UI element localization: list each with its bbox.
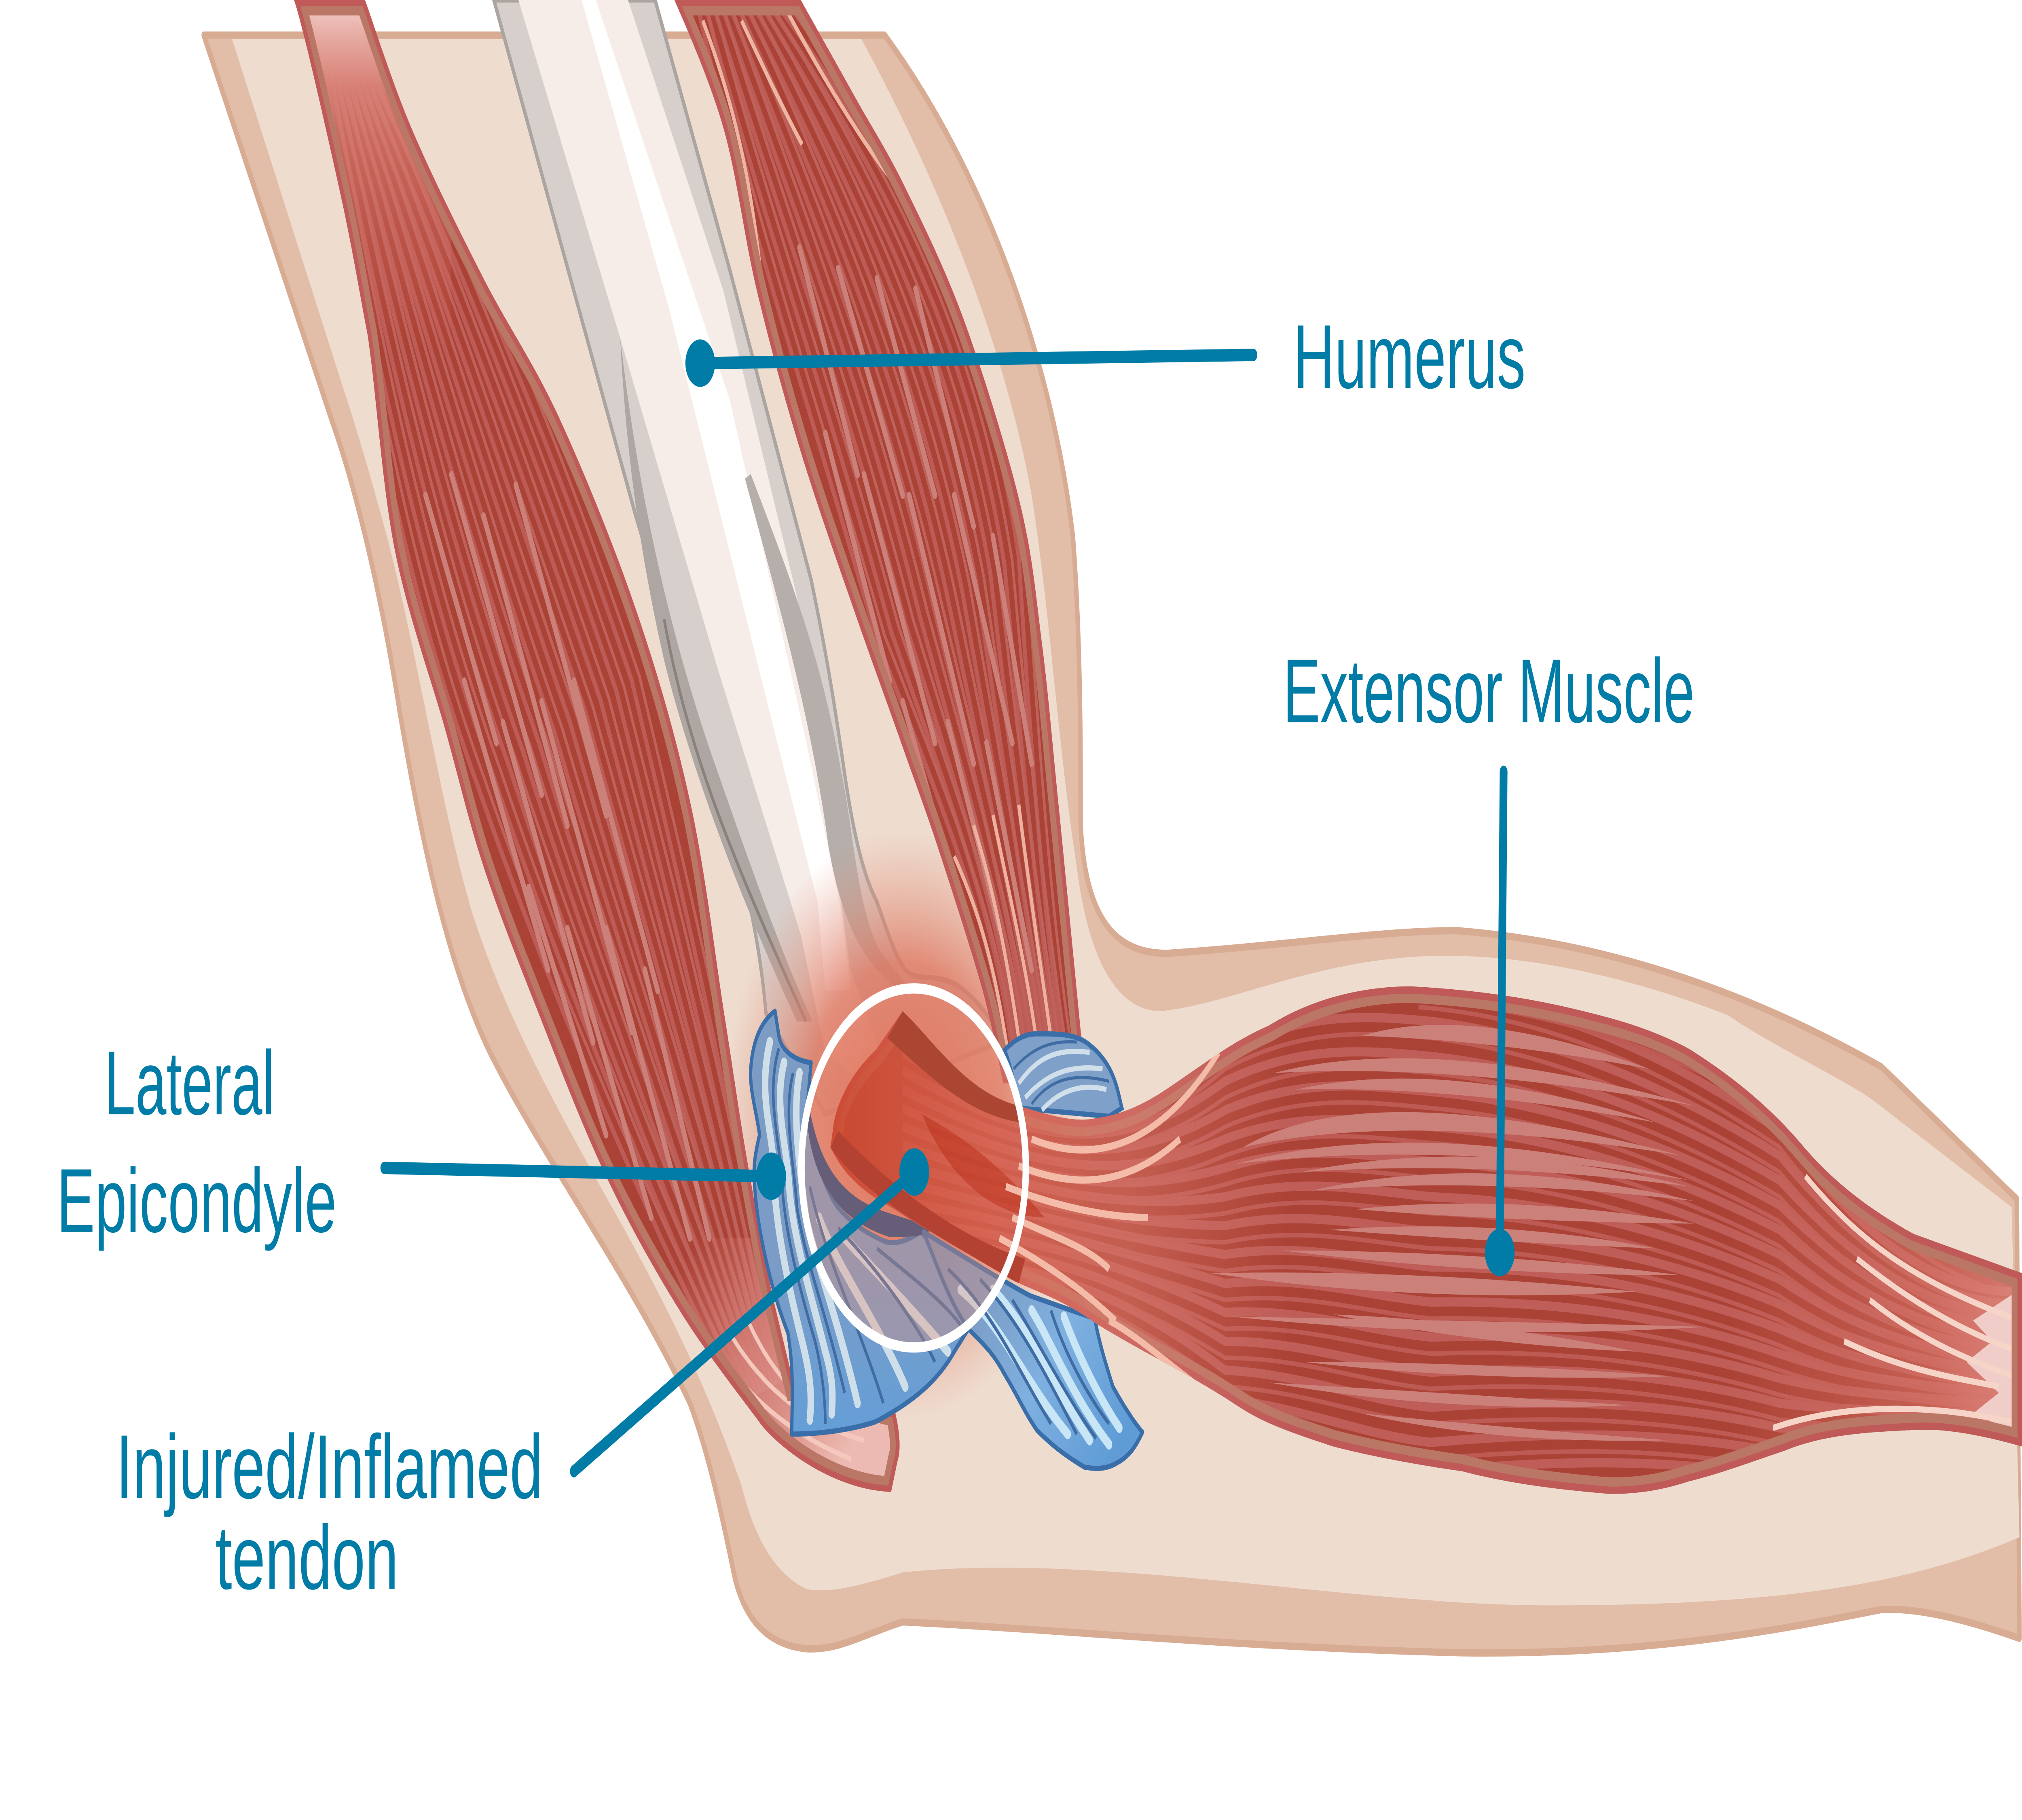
label: Lateral Epicondyle: Epicondyle (57, 1150, 336, 1251)
muscle: extensor (825, 970, 2022, 1494)
pointer: extensor muscle (1485, 772, 1514, 1276)
muscle: upper right (675, 0, 1086, 1084)
label: Humerus: Humerus (1293, 306, 1525, 407)
pale fibres (765, 1042, 948, 1420)
ligament: lateral epicondyle (751, 1011, 975, 1434)
arm silhouette (204, 35, 2020, 1653)
bone shadow right (748, 477, 903, 986)
tendon streaks near elbow (999, 1052, 1231, 1407)
inflamed zone overlay (799, 986, 1026, 1350)
head bottom shadow (831, 1131, 1025, 1283)
bone outer shaft (494, 0, 1005, 1114)
bone highlight (582, 0, 851, 990)
pale tendon streaks (954, 805, 1058, 1084)
muscle: upper left (284, 0, 916, 1506)
pointer: humerus (685, 339, 1253, 387)
dark crescent (808, 1114, 926, 1234)
label: Extensor Muscle: Extensor Muscle (1283, 640, 1694, 742)
bone light core (518, 0, 903, 1114)
head top shadow (887, 1011, 1023, 1123)
dark fibres (948, 1269, 1109, 1438)
dark fibres (773, 1048, 964, 1424)
bone shadow left (620, 339, 812, 1022)
label: Lateral Epicondyle: Lateral (104, 1032, 275, 1134)
label: Injured/Inflamed tendon: tendon (216, 1507, 398, 1608)
label: Injured/Inflamed tendon: Injured/Inflamed (116, 1416, 543, 1517)
humerus bone (494, 0, 1005, 1114)
lower tendon (684, 1238, 890, 1476)
head colour wash (825, 970, 1303, 1465)
bone shadow line (664, 619, 806, 1022)
ligament: upper right (1005, 1034, 1122, 1116)
tail colour wash (1728, 1114, 2022, 1486)
inflammation glow (725, 832, 1081, 1418)
pointer: injured tendon (574, 1148, 929, 1471)
lens highlights (799, 248, 1032, 970)
pale fibres (961, 1290, 1119, 1444)
outer skin (204, 35, 2020, 1653)
top tendon (309, 15, 451, 292)
label: Injured/Inflamed tendon (116, 1416, 543, 1608)
pointer: lateral epicondyle (384, 1152, 786, 1200)
ligament: lower right (923, 1232, 1142, 1469)
lens highlights (425, 474, 709, 1238)
label: Lateral Epicondyle (57, 1032, 336, 1251)
muscle highlights (1211, 1025, 1707, 1441)
inner skin (232, 39, 2020, 1605)
white highlight circle (802, 988, 1026, 1348)
right tendon (1967, 1290, 2020, 1434)
dark red head core (922, 1114, 1045, 1217)
